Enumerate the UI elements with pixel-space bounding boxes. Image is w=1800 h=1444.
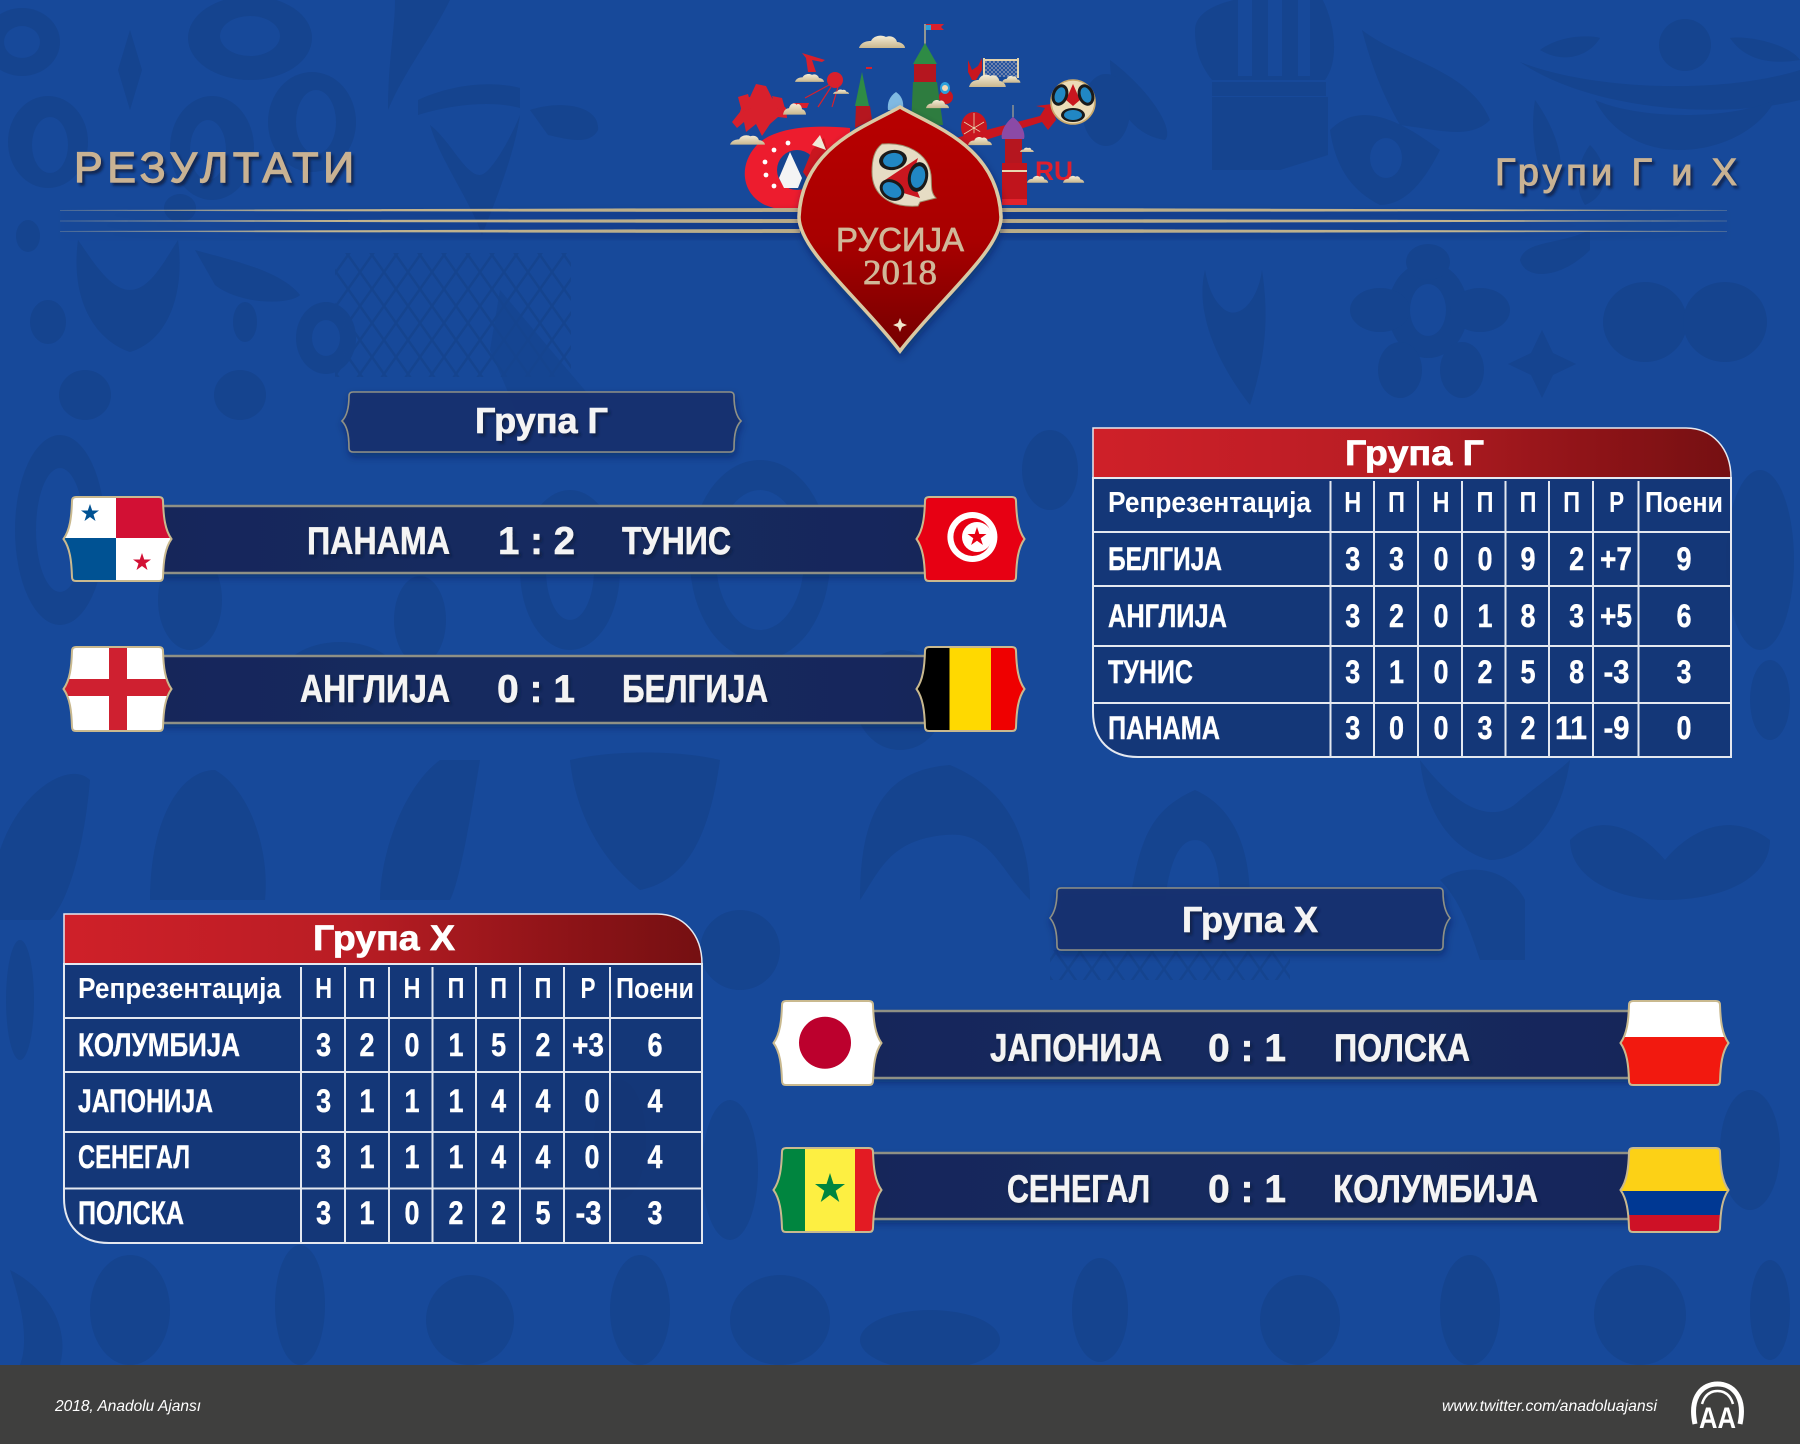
table header band: Група Х [313, 919, 456, 958]
row: Senegal: 4 [536, 1139, 551, 1175]
flag: Japan [770, 1001, 886, 1085]
flag: Tunisia [913, 497, 1029, 581]
row: England: 2 [1389, 598, 1404, 634]
table header band [64, 914, 702, 964]
table: group H standings [64, 914, 702, 1243]
row: Poland: ПОЛСКА [78, 1195, 184, 1231]
match: Senegal 0:1 Colombia [770, 1148, 1733, 1232]
table header band: Група Г [1345, 434, 1484, 473]
icon: AA logo: AA [1699, 1402, 1736, 1435]
flag on cloud [793, 103, 809, 108]
table column headings: П [1388, 487, 1405, 519]
row: Japan: 4 [536, 1083, 551, 1119]
row: England [1108, 598, 1692, 634]
row: Belgium [1108, 541, 1692, 577]
table column headings [1108, 487, 1723, 519]
row: Colombia: 2 [536, 1027, 550, 1063]
row: Japan [78, 1083, 663, 1119]
row: Belgium: 9 [1520, 541, 1536, 577]
table header band [1093, 428, 1731, 478]
ball [1049, 80, 1097, 124]
row: Colombia: 2 [360, 1027, 374, 1063]
row: England: АНГЛИЈА [1108, 598, 1227, 634]
match: Senegal 0:1 Colombia: 0 : 1 [1208, 1168, 1286, 1211]
row: Panama: 0 [1434, 710, 1448, 746]
row: Poland: -3 [576, 1195, 602, 1231]
badge text: 2018: 2018 [863, 253, 937, 292]
table column headings [78, 973, 694, 1005]
decorative lighter inner swirls [4, 0, 1446, 630]
row: Poland: 3 [648, 1195, 662, 1231]
row: Panama: -9 [1604, 710, 1630, 746]
row: Japan: ЈАПОНИЈА [78, 1083, 213, 1119]
row: Colombia: 5 [491, 1027, 506, 1063]
matryoshka [939, 82, 953, 104]
header illustration [730, 24, 1097, 211]
match: Japan 0:1 Poland [770, 1001, 1733, 1085]
footer link: www.twitter.com/anadoluajansi [1442, 1398, 1657, 1415]
flag: Belgium [913, 647, 1029, 731]
row: Senegal: СЕНЕГАЛ [78, 1139, 190, 1175]
row: Tunisia [1108, 654, 1692, 690]
row: Japan: 1 [448, 1083, 464, 1119]
table column headings: П [1520, 487, 1536, 519]
flag: Senegal [770, 1148, 886, 1232]
match: England 0:1 Belgium [60, 647, 1029, 731]
row: Colombia: +3 [572, 1027, 604, 1063]
sputnik [805, 72, 843, 107]
row: Colombia: 0 [404, 1027, 420, 1063]
subtitle: Групи Г и Х [1495, 152, 1737, 194]
match: Japan 0:1 Poland: ЈАПОНИЈА [990, 1027, 1162, 1070]
row: Belgium: 9 [1676, 541, 1692, 577]
small tower [855, 67, 872, 128]
row: Tunisia: 5 [1520, 654, 1536, 690]
Russia 2018 badge [799, 107, 1001, 351]
match: England 0:1 Belgium: БЕЛГИЈА [622, 668, 768, 711]
table column headings: П [1476, 487, 1494, 519]
row: Poland: 3 [316, 1195, 331, 1231]
row: Colombia: 6 [648, 1027, 662, 1063]
match: Japan 0:1 Poland: ПОЛСКА [1334, 1027, 1470, 1070]
row: Colombia: 3 [316, 1027, 331, 1063]
row: Poland: 2 [448, 1195, 464, 1231]
egg [961, 112, 987, 142]
row: England: 3 [1569, 598, 1584, 634]
goal net and player [968, 58, 1018, 80]
table column headings: Н [1344, 487, 1361, 519]
row: Poland [78, 1195, 662, 1231]
footer bar [0, 1365, 1800, 1444]
table column headings: Р [1609, 487, 1624, 519]
table column headings: Репрезентација [1108, 487, 1312, 519]
table column headings: Н [404, 973, 420, 1005]
match: Senegal 0:1 Colombia: КОЛУМБИЈА [1333, 1168, 1538, 1211]
table column headings: Н [1432, 487, 1450, 519]
table column headings: Поени [1645, 487, 1723, 519]
table column headings: П [1563, 487, 1580, 519]
row: Colombia [78, 1027, 662, 1063]
match: England 0:1 Belgium: 0 : 1 [497, 668, 575, 711]
table column headings: Р [580, 973, 596, 1005]
row: Senegal: 4 [491, 1139, 506, 1175]
row: England: +5 [1600, 598, 1632, 634]
row: Poland: 5 [536, 1195, 550, 1231]
table: group G standings [1093, 428, 1731, 757]
table column headings: П [448, 973, 464, 1005]
row: England: 1 [1478, 598, 1492, 634]
table column headings: П [490, 973, 507, 1005]
flag: Colombia [1617, 1148, 1733, 1232]
badge star [893, 318, 907, 332]
red swirl with mountains [745, 127, 850, 211]
flag: England [60, 647, 176, 731]
title: РЕЗУЛТАТИ [74, 144, 354, 192]
row: Panama: 3 [1478, 710, 1492, 746]
row: Japan: 3 [316, 1083, 331, 1119]
row: Belgium: +7 [1600, 541, 1632, 577]
ribbon [948, 104, 1056, 150]
row: Colombia: 1 [448, 1027, 464, 1063]
match: Japan 0:1 Poland: 0 : 1 [1208, 1027, 1286, 1070]
row: Belgium: 0 [1478, 541, 1492, 577]
row: Senegal: 1 [448, 1139, 464, 1175]
table column headings: П [358, 973, 376, 1005]
row: England: 0 [1434, 598, 1448, 634]
row: Poland: 2 [491, 1195, 506, 1231]
icon: AA logo [1694, 1384, 1741, 1435]
row: Panama: 0 [1676, 710, 1692, 746]
row: Senegal: 3 [316, 1139, 331, 1175]
row: Tunisia: 2 [1478, 654, 1492, 690]
match: Panama 1:2 Tunisia [60, 497, 1029, 581]
row: Panama: 2 [1520, 710, 1536, 746]
flying figure [802, 53, 825, 72]
blue dome [888, 92, 903, 110]
row: Senegal: 1 [360, 1139, 374, 1175]
row: Japan: 4 [648, 1083, 663, 1119]
row: Senegal [78, 1139, 663, 1175]
footer credit: 2018, Anadolu Ajansı [54, 1398, 201, 1415]
panel: group H heading [1050, 888, 1450, 950]
panel: group H heading: Група Х [1182, 899, 1318, 940]
row: Belgium: 2 [1569, 541, 1584, 577]
row: Belgium: 3 [1345, 541, 1360, 577]
row: Japan: 1 [404, 1083, 420, 1119]
match: Panama 1:2 Tunisia: 1 : 2 [498, 520, 575, 563]
row: Poland: 1 [360, 1195, 374, 1231]
row: Tunisia: ТУНИС [1108, 654, 1193, 690]
row: Tunisia: -3 [1604, 654, 1630, 690]
row: Belgium: 0 [1434, 541, 1448, 577]
row: Panama: 11 [1555, 710, 1587, 746]
clouds [730, 36, 1084, 183]
table grid [1093, 478, 1731, 757]
flag: Panama [60, 497, 176, 581]
table column headings: Поени [616, 973, 694, 1005]
row: Senegal: 1 [404, 1139, 420, 1175]
row: Panama: ПАНАМА [1108, 710, 1220, 746]
row: England: 6 [1676, 598, 1692, 634]
red tower [1002, 105, 1027, 205]
match: Panama 1:2 Tunisia: ТУНИС [622, 520, 731, 563]
row: Tunisia: 1 [1389, 654, 1404, 690]
header rule lines [60, 208, 1727, 233]
row: Tunisia: 3 [1676, 654, 1692, 690]
match: England 0:1 Belgium: АНГЛИЈА [300, 668, 450, 711]
row: Japan: 1 [360, 1083, 374, 1119]
match: Panama 1:2 Tunisia: ПАНАМА [307, 520, 450, 563]
row: England: 8 [1520, 598, 1536, 634]
row: Belgium: БЕЛГИЈА [1108, 541, 1222, 577]
row: Poland: 0 [404, 1195, 420, 1231]
row: Japan: 0 [584, 1083, 600, 1119]
row: Panama [1108, 710, 1692, 746]
RU label: RU [1035, 156, 1073, 186]
green tower [911, 24, 944, 125]
table column headings: Н [315, 973, 332, 1005]
emblem [872, 144, 936, 206]
badge text: Русија: РУСИЈА [836, 221, 964, 258]
row: Senegal: 4 [648, 1139, 663, 1175]
row: Tunisia: 0 [1434, 654, 1448, 690]
row: Panama: 3 [1345, 710, 1360, 746]
table column headings: Репрезентација [78, 973, 282, 1005]
row: Tunisia: 3 [1345, 654, 1360, 690]
panel: group G heading: Група Г [475, 400, 608, 441]
table grid [64, 964, 702, 1243]
panel: group G heading [342, 392, 741, 452]
flag: Poland [1617, 1001, 1733, 1085]
table column headings: П [534, 973, 552, 1005]
row: Senegal: 0 [584, 1139, 600, 1175]
row: Japan: 4 [491, 1083, 506, 1119]
row: England: 3 [1345, 598, 1360, 634]
row: Tunisia: 8 [1569, 654, 1584, 690]
match: Senegal 0:1 Colombia: СЕНЕГАЛ [1007, 1168, 1150, 1211]
row: Colombia: КОЛУМБИЈА [78, 1027, 240, 1063]
row: Belgium: 3 [1389, 541, 1404, 577]
row: Panama: 0 [1389, 710, 1404, 746]
red horses [732, 84, 787, 136]
